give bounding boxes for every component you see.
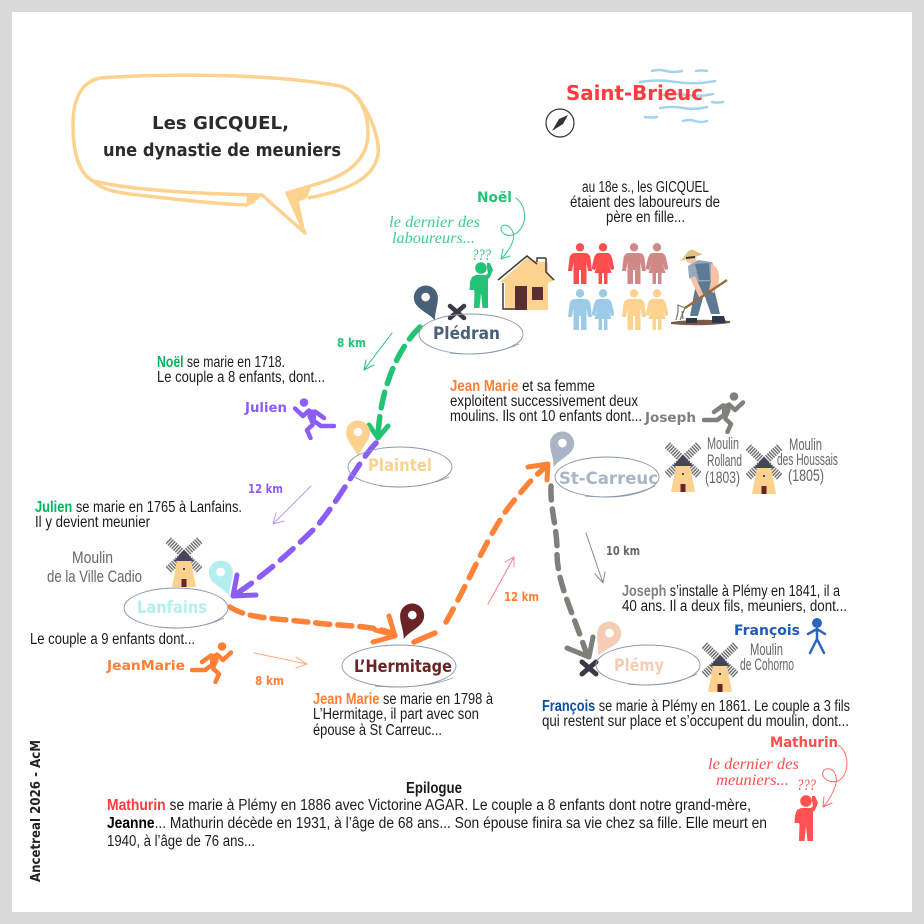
text: Jean Marie mills — [450, 378, 642, 425]
route: L'Hermitage to St-Carreuc — [414, 464, 548, 642]
title: Les GICQUEL, — [152, 113, 289, 134]
place: Plémy — [582, 617, 700, 685]
annotation: Mathurin: meuniers... — [716, 772, 789, 789]
route: Plaintel to Lanfains — [233, 443, 376, 596]
annotation: Mathurin — [708, 735, 847, 807]
annotation: Mathurin: Mathurin — [770, 735, 838, 751]
runner: Joseph: Joseph — [644, 410, 696, 426]
epilogue: Mathurin se marie à Plémy en 1886 avec Victorine AGAR. Le couple a 8 enfants dont notre grand-mère, — [107, 797, 751, 814]
mill: Rolland: Rolland — [707, 451, 742, 470]
runner: Julien — [244, 398, 334, 438]
mill: Cohorno: de Cohorno — [740, 655, 794, 674]
text: Julien marriage — [35, 499, 242, 531]
mill: Ville Cadio: Moulin — [72, 548, 113, 567]
mill: Rolland: (1803) — [705, 468, 740, 487]
place: Plédran — [410, 282, 523, 354]
annotation: Noël: laboureurs... — [392, 230, 475, 247]
epilogue — [107, 780, 767, 850]
icon: farmer with hoe — [671, 250, 730, 325]
place: Lanfains: Lanfains — [137, 598, 207, 618]
mill: Houssais: Moulin — [789, 435, 822, 454]
text: François marriage — [542, 698, 850, 730]
mill: Ville Cadio: de la Ville Cadio — [47, 567, 142, 586]
title: une dynastie de meuniers — [103, 140, 341, 161]
text: Jean Marie mills: Jean Marie et sa femme — [450, 378, 595, 395]
text: Joseph moves to Plémy — [622, 583, 847, 615]
thin arrows with distances: 12 km — [248, 482, 283, 496]
text: Joseph moves to Plémy: 40 ans. Il a deux fils, meuniers, dont... — [622, 598, 847, 615]
thin arrows with distances: 8 km — [255, 674, 284, 688]
text: Jean Marie marriage: L’Hermitage, il part avec son — [313, 706, 479, 723]
intro text: étaient des laboureurs de — [570, 194, 720, 211]
runner: Jean Marie — [106, 642, 231, 682]
mill: Rolland — [667, 434, 742, 492]
text: François marriage: François se marie à Plémy en 1861. Le couple a 3 fils — [542, 698, 850, 715]
route: Lanfains to L'Hermitage — [230, 607, 395, 642]
text: Jean Marie marriage: Jean Marie se marie en 1798 à — [313, 691, 493, 708]
place: St-Carreuc: St-Carreuc — [559, 469, 658, 489]
mill: Houssais — [748, 435, 838, 494]
place: Plémy: Plémy — [614, 656, 664, 676]
icon: house — [498, 256, 555, 310]
route: Plédran to Plaintel — [369, 327, 420, 438]
epilogue: 1940, à l’âge de 76 ans... — [107, 833, 255, 850]
intro text: père en fille... — [606, 209, 685, 226]
place: St-Carreuc — [542, 428, 659, 497]
couples icons — [568, 243, 668, 330]
mill: Houssais: des Houssais — [777, 450, 838, 469]
route: St-Carreuc to Plémy — [551, 486, 593, 657]
epilogue: Jeanne... Mathurin décède en 1931, à l’âge de 68 ans... Son épouse finira sa vie chez sa fille. Elle meurt en — [107, 815, 767, 832]
place name: Saint-Brieuc: Saint-Brieuc — [566, 81, 703, 105]
text: Jean Marie mills: exploitent successivement deux — [450, 393, 638, 410]
icon: thinking man red — [794, 795, 818, 841]
text: Joseph moves to Plémy: Joseph s’installe à Plémy en 1841, il a — [622, 583, 840, 600]
epilogue: Epilogue — [406, 780, 462, 797]
mill: Cohorno — [704, 640, 794, 692]
sea waves — [640, 70, 723, 122]
annotation: Noël — [389, 190, 525, 264]
runner: Julien: Julien — [244, 400, 287, 416]
mill: Rolland: Moulin — [707, 434, 739, 453]
person: François — [734, 618, 825, 653]
text: Noël marriage: Le couple a 8 enfants, dont... — [157, 369, 325, 386]
thin arrows with distances: 12 km — [504, 590, 539, 604]
text: François marriage: qui restent sur place et s’occupent du moulin, dont... — [542, 713, 849, 730]
thin arrows with distances: 8 km — [337, 336, 366, 350]
intro text — [570, 179, 720, 226]
place: Lanfains — [124, 557, 241, 628]
icon: thinking man green — [470, 262, 493, 308]
mill: Ville Cadio — [47, 540, 200, 587]
title — [103, 113, 341, 161]
text: Lanfains children: Le couple a 9 enfants dont... — [30, 631, 195, 648]
text: Jean Marie marriage: épouse à St Carreuc... — [313, 722, 442, 739]
intro text: au 18e s., les GICQUEL — [582, 179, 709, 196]
text: Julien marriage: Julien se marie en 1765 à Lanfains. — [35, 499, 242, 516]
speech bubble with title — [73, 75, 378, 233]
mill: Houssais: (1805) — [788, 466, 824, 485]
place: L'Hermitage: L’Hermitage — [354, 657, 452, 677]
credit: Ancetreal 2026 - AcM — [29, 740, 44, 882]
thin arrows with distances: 10 km — [606, 544, 640, 558]
text: Noël marriage — [157, 354, 325, 386]
text: Noël marriage: Noël se marie en 1718. — [157, 354, 285, 371]
text: Jean Marie mills: moulins. Ils ont 10 enfants dont... — [450, 408, 642, 425]
person: François: François — [734, 623, 800, 639]
text: Jean Marie marriage — [313, 691, 493, 739]
annotation: Mathurin: ??? — [797, 777, 816, 794]
place: Plédran: Plédran — [433, 324, 500, 344]
runner: Jean Marie: JeanMarie — [106, 658, 185, 674]
mill: Cohorno: Moulin — [750, 640, 783, 659]
text: Julien marriage: Il y devient meunier — [35, 514, 150, 531]
annotation: Mathurin: le dernier des — [708, 756, 799, 773]
place: Plaintel — [346, 420, 452, 487]
place: L'Hermitage — [342, 600, 456, 687]
annotation: Noël: le dernier des — [389, 214, 480, 231]
thin arrows with distances — [248, 333, 640, 688]
place: Plaintel: Plaintel — [368, 456, 432, 476]
runner: Joseph — [644, 392, 743, 432]
annotation: Noël: ??? — [472, 247, 491, 264]
icon: compass — [546, 109, 574, 137]
annotation: Noël: Noël — [477, 190, 512, 206]
